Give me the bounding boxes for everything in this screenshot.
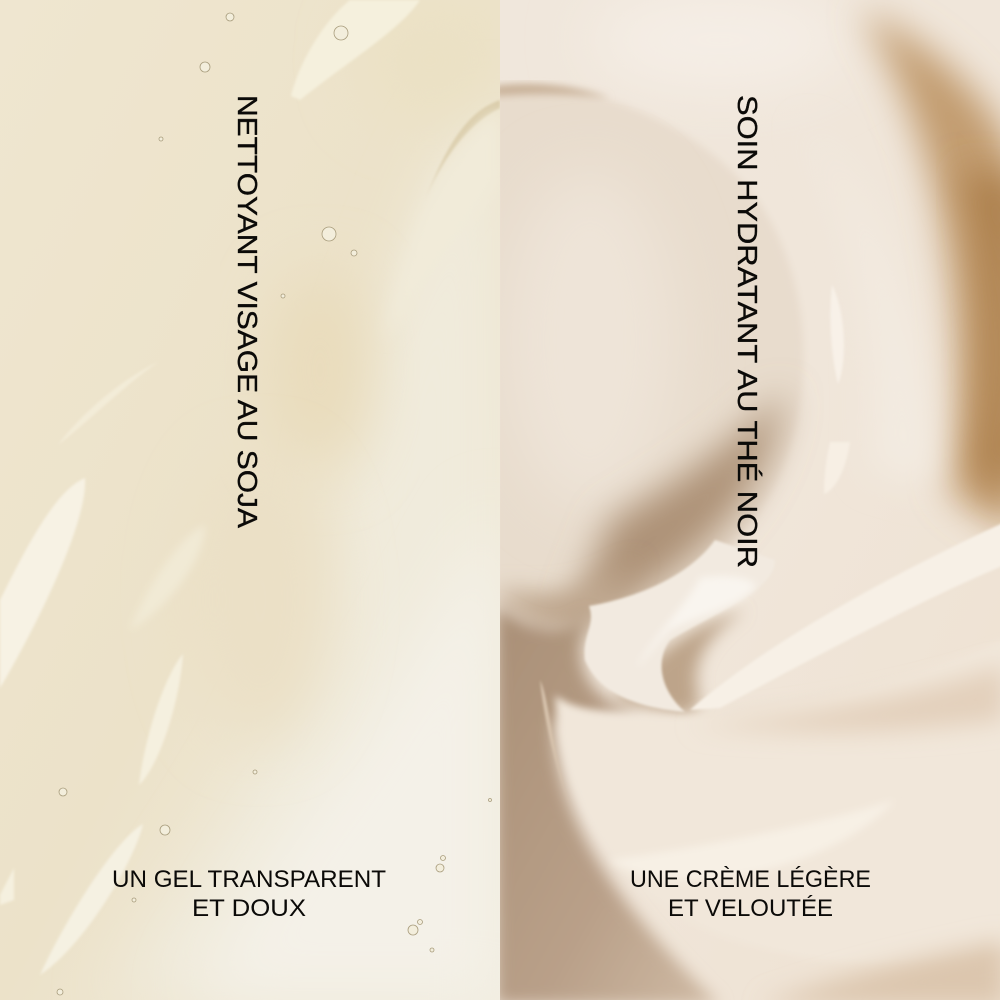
lobe glossy highlight: [666, 577, 752, 630]
caption: transparent gel: [112, 866, 386, 922]
brown crescent top right: [860, 10, 1000, 530]
highlight: centre gel streak: [139, 654, 183, 785]
shadow ring beside bowl: [891, 387, 960, 487]
shading between lobe and swoosh: [615, 610, 745, 716]
long swoosh highlight: [690, 522, 1000, 710]
bottom right shade: [760, 940, 1000, 1000]
vertical heading: soy cleanser: NETTOYANT VISAGE AU SOJA: [232, 95, 263, 528]
small vertical glints: [830, 289, 844, 380]
caption: velvety cream: [630, 866, 871, 922]
cream lobe: [584, 539, 752, 712]
panel: black tea cream texture: [495, 0, 1000, 1000]
lower cream swoosh: [551, 694, 1000, 930]
bowl inner shading: [570, 390, 785, 620]
panel: soy cleanser gel texture: [0, 0, 500, 1000]
caption: transparent gel: ET DOUX: [192, 895, 306, 922]
gel bubbles: [57, 13, 492, 995]
vertical heading: black tea moisturizer: SOIN HYDRATANT AU THÉ NOIR: [732, 95, 763, 568]
highlight: top gel streak: [291, 0, 420, 100]
highlight: left gel streak: [0, 478, 85, 688]
cream bowl: [495, 86, 804, 630]
highlight: lower gel streak: [40, 824, 143, 975]
lower left shadow: [495, 605, 720, 1000]
caption: velvety cream: ET VELOUTÉE: [668, 895, 833, 922]
caption: transparent gel: UN GEL TRANSPARENT: [112, 866, 386, 893]
lower sheen: [621, 809, 879, 877]
caption: velvety cream: UNE CRÈME LÉGÈRE: [630, 866, 871, 893]
